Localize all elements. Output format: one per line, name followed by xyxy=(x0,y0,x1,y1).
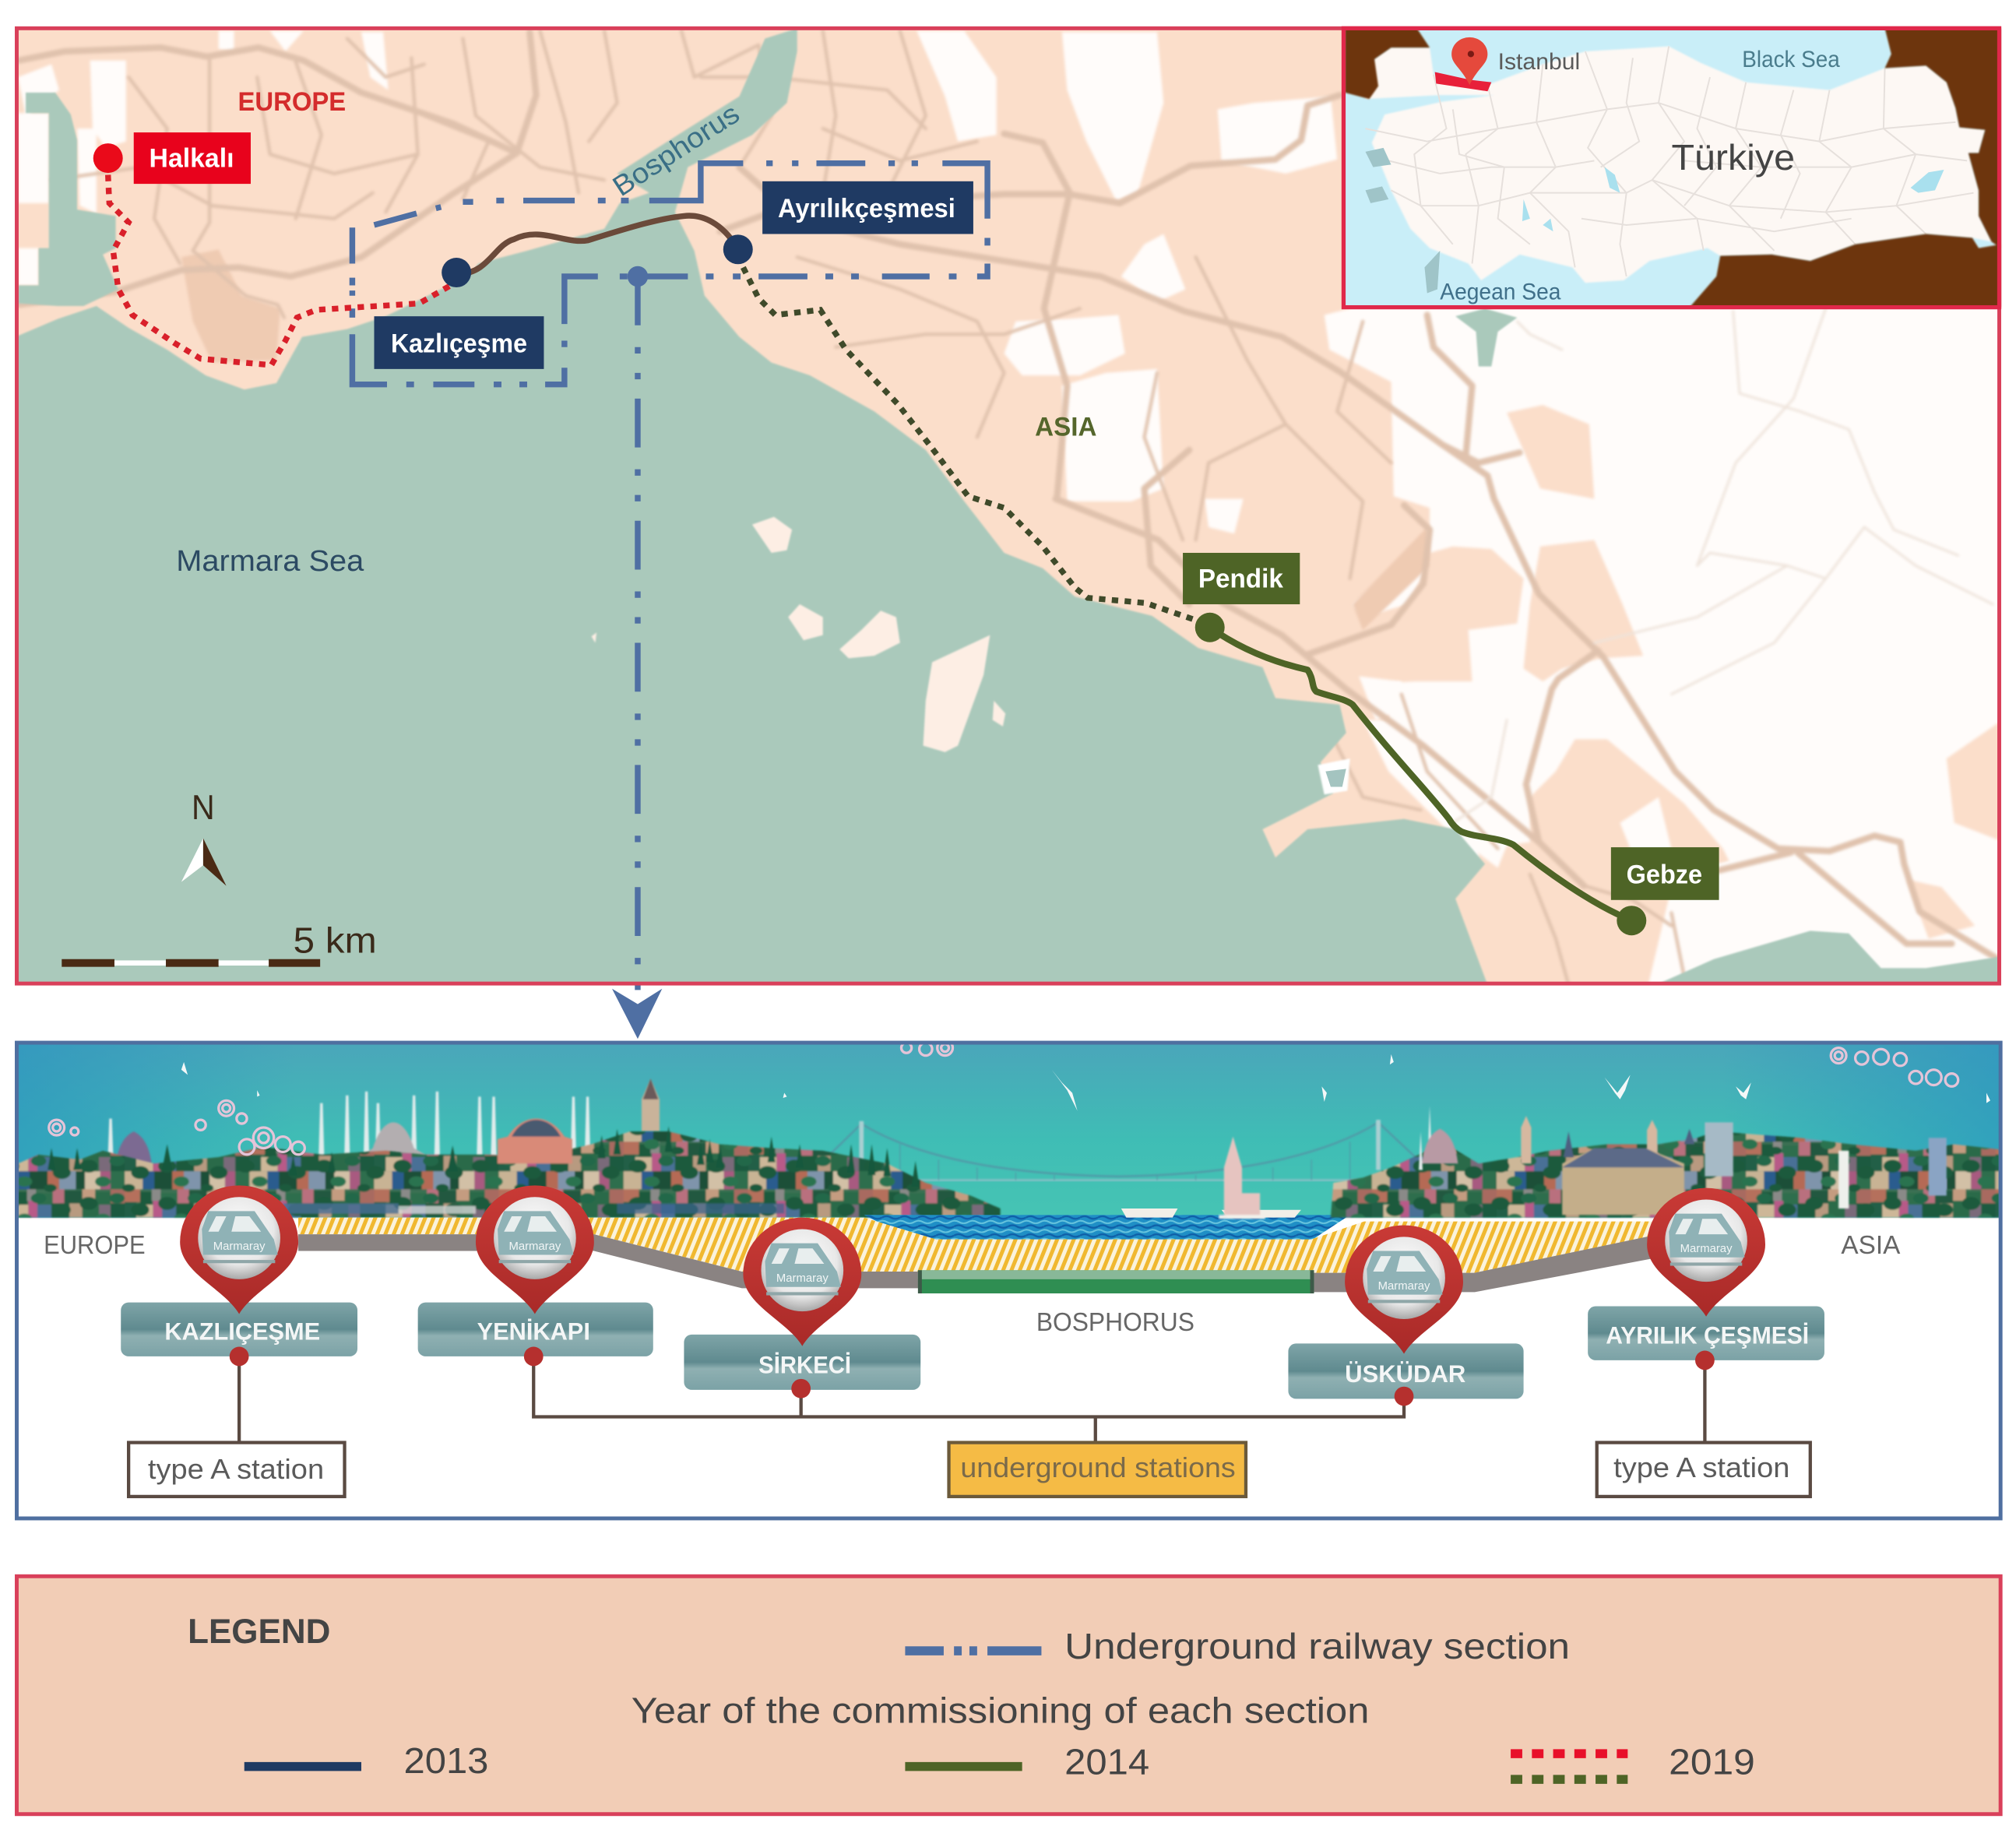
green immersed tube xyxy=(918,1270,1314,1293)
legend: 2013: 2013 xyxy=(403,1740,488,1781)
pin: Ayrilik Cesmesi xyxy=(1647,1188,1765,1317)
label: Halkali xyxy=(134,132,251,184)
illustration: Istanbul skyline xyxy=(18,1040,2000,1242)
panel: legend xyxy=(16,1576,2000,1814)
label: EUROPE side: EUROPE xyxy=(44,1230,146,1259)
station dot: Ayrilikcesmesi xyxy=(723,234,753,264)
callout: type A station left xyxy=(128,1443,345,1497)
land: open white areas xyxy=(19,30,1729,868)
panel: Marmaray cross section xyxy=(16,1040,2000,1518)
pin: Sirkeci: Marmaray xyxy=(776,1272,829,1285)
icon: location pin xyxy=(1451,37,1487,85)
callout: type A station right xyxy=(1597,1443,1810,1497)
pin: Yenikapi: Marmaray xyxy=(508,1240,561,1253)
city right xyxy=(1331,1131,2000,1218)
Istanbul province xyxy=(1435,72,1491,91)
land: urban area xyxy=(16,27,2000,985)
label: Bosphorus: Bosphorus xyxy=(607,97,745,202)
legend: commissioning heading: Year of the commissioning of each section xyxy=(632,1690,1369,1730)
station dot: Kazlicesme xyxy=(442,258,471,287)
birds xyxy=(181,1054,1990,1111)
callout: underground stations: underground stations xyxy=(960,1451,1236,1483)
legend: 2019: 2019 xyxy=(1669,1742,1755,1782)
line: 2019 green dotted section xyxy=(743,267,1198,621)
scale bar xyxy=(62,920,377,967)
station label: KAZLICESME: KAZLIÇEŞME xyxy=(164,1318,320,1345)
inset border xyxy=(1343,28,2000,308)
label: Aegean Sea: Aegean Sea xyxy=(1440,280,1561,305)
pin: Kazlicesme xyxy=(180,1185,298,1314)
ground: grey tunnel right xyxy=(1311,1234,1659,1292)
label: Marmara Sea: Marmara Sea xyxy=(176,545,364,578)
station dot: Pendik xyxy=(1195,613,1225,642)
pin: Yenikapi xyxy=(476,1185,594,1314)
boats xyxy=(1121,1209,1301,1218)
lake: Kucukcekmece xyxy=(18,93,118,306)
minarets and domes behind left city xyxy=(107,1078,660,1177)
callout: underground stations xyxy=(949,1443,1246,1497)
callout: type A station right: type A station xyxy=(1613,1451,1789,1483)
station dot: Gebze xyxy=(1617,906,1646,935)
province boundaries xyxy=(1366,46,1973,276)
pin: Ayrilik Cesmesi: Marmaray xyxy=(1680,1243,1733,1255)
icon: north arrow xyxy=(181,789,227,886)
label: EUROPE: EUROPE xyxy=(237,87,346,117)
pin: Sirkeci xyxy=(743,1218,861,1346)
lakes and islands xyxy=(1522,167,1944,231)
legend title: LEGEND xyxy=(188,1613,330,1651)
station dot: Halkali xyxy=(93,143,123,173)
line: 2019 red dotted section xyxy=(108,175,456,365)
label: Halkali: Halkalı xyxy=(150,144,234,174)
label: Gebze xyxy=(1611,847,1719,900)
label: Ayrilikcesmesi: Ayrılıkçeşmesi xyxy=(778,194,955,223)
line: 2014 green section xyxy=(1210,628,1617,914)
station label: USKUDAR: ÜSKÜDAR xyxy=(1345,1360,1465,1388)
label: ASIA side: ASIA xyxy=(1841,1230,1900,1259)
lake: Tuzla lagoon xyxy=(1325,769,1346,786)
icon: north arrow: N xyxy=(192,789,215,827)
label: Istanbul: Istanbul xyxy=(1498,49,1580,75)
sea: Marmara and Bosphorus xyxy=(16,28,1487,985)
label: Pendik xyxy=(1183,553,1300,604)
station label: SIRKECI xyxy=(684,1335,920,1398)
callout: type A station left: type A station xyxy=(148,1453,324,1485)
Maiden's Tower xyxy=(1219,1137,1265,1219)
station label: AYRILIK CESMESI xyxy=(1588,1307,1824,1370)
legend: underground railway text: Underground railway section xyxy=(1064,1626,1570,1666)
connector: dash-dot line to section panel xyxy=(628,266,648,993)
panel border xyxy=(16,1043,2000,1518)
arrow head xyxy=(612,989,662,1039)
roads xyxy=(19,31,1998,985)
label: Gebze: Gebze xyxy=(1627,860,1702,889)
station label: YENIKAPI: YENİKAPI xyxy=(477,1318,590,1345)
underground section frame xyxy=(352,164,987,385)
connector lines xyxy=(239,1356,1705,1443)
pin: Kazlicesme: Marmaray xyxy=(213,1240,266,1253)
line: 2013 brown section xyxy=(460,216,738,274)
terrain: darker peach area xyxy=(181,249,1430,630)
sea: far east gulf xyxy=(1656,931,2000,985)
label: Ayrilikcesmesi xyxy=(762,181,973,234)
clouds xyxy=(49,1040,1958,1155)
label: ASIA: ASIA xyxy=(1035,413,1096,442)
pin: Uskudar: Marmaray xyxy=(1378,1280,1430,1293)
lake: Omerli dam xyxy=(1455,308,1517,367)
label: Turkiye: Türkiye xyxy=(1671,137,1795,178)
bridge xyxy=(804,1120,1440,1180)
legend: 2014: 2014 xyxy=(1064,1742,1149,1782)
station label: YENIKAPI xyxy=(418,1303,653,1366)
label: Black Sea: Black Sea xyxy=(1742,47,1840,72)
label: Kazlicesme xyxy=(374,316,544,369)
panel border xyxy=(16,28,2000,983)
label: Kazlicesme: Kazlıçeşme xyxy=(391,329,527,358)
pin: Uskudar xyxy=(1345,1226,1463,1354)
legend: underground railway symbol xyxy=(905,1648,1041,1654)
station label: SIRKECI: SİRKECİ xyxy=(758,1351,851,1378)
city left xyxy=(18,1118,1001,1218)
neighbours: brown areas xyxy=(1345,28,2000,308)
scale bar: 5 km xyxy=(293,920,377,960)
inset map: Turkiye xyxy=(1343,28,2000,308)
water xyxy=(864,1215,1350,1242)
panel: Istanbul map xyxy=(16,27,2000,993)
label: BOSPHORUS: BOSPHORUS xyxy=(1036,1307,1194,1336)
islands xyxy=(592,517,1350,794)
station label: KAZLICESME xyxy=(121,1303,357,1366)
ground: grey tunnel left xyxy=(298,1234,920,1288)
station label: USKUDAR xyxy=(1288,1343,1524,1406)
station label: AYRILIK CESMESI: AYRILIK ÇEŞMESİ xyxy=(1606,1321,1809,1349)
label: Pendik: Pendik xyxy=(1198,565,1284,594)
towers right xyxy=(1419,1106,1947,1215)
ground: hatched rock layer xyxy=(298,1218,1659,1273)
Turkiye land xyxy=(1366,46,1992,283)
